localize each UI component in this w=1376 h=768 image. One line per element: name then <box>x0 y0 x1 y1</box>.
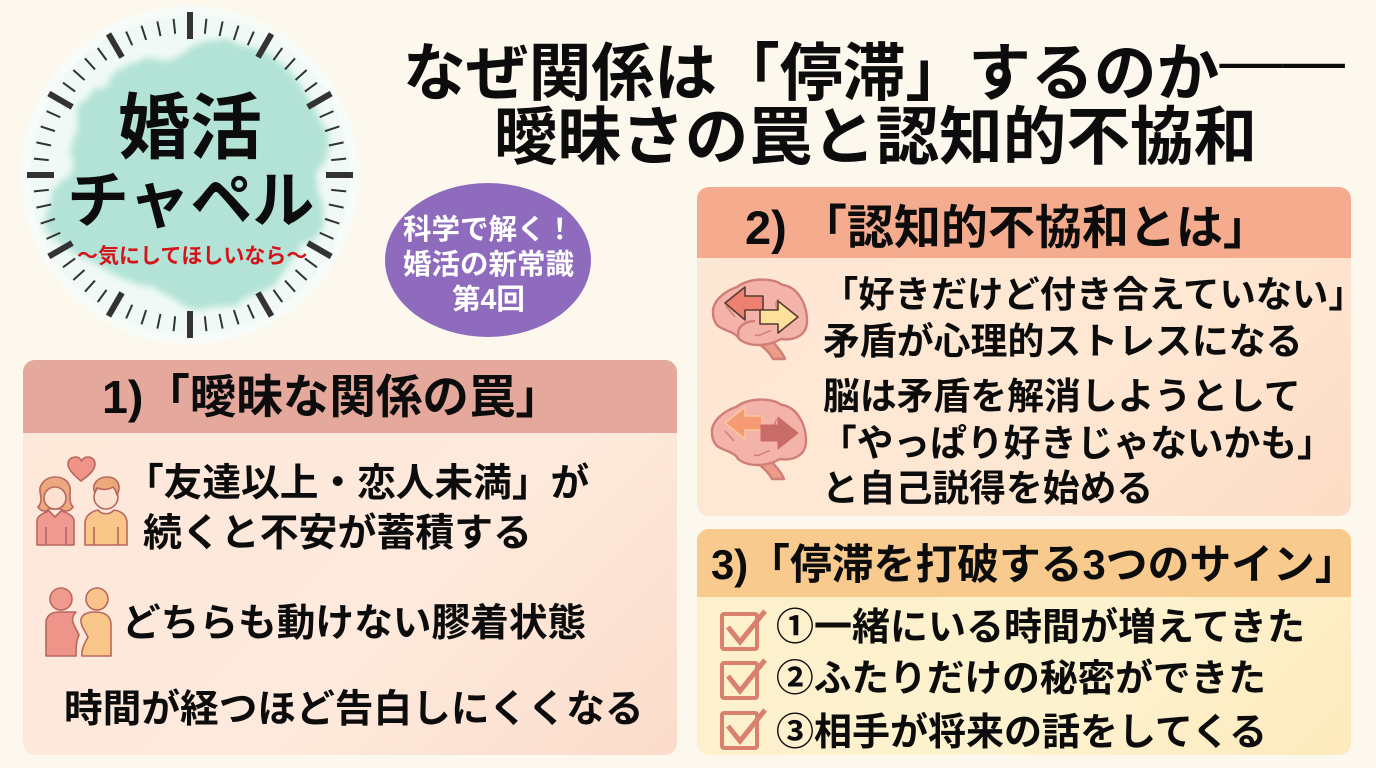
text: 友達以上: 「友達以上・恋人未満」が <box>125 462 589 505</box>
panel 3: 停滞を打破する3つのサイン <box>697 529 1351 755</box>
text: sign 2: ②ふたりだけの秘密ができた <box>776 657 1266 699</box>
panel 2: 認知的不協和とは <box>697 187 1351 516</box>
panel 2 header <box>697 187 1351 258</box>
panel 3 heading: 3)「停滞を打破する3つのサイン」 <box>711 541 1351 588</box>
text: sign 1: ①一緒にいる時間が増えてきた <box>776 607 1305 649</box>
text: 矛盾がストレス: 矛盾が心理的ストレスになる <box>823 321 1303 362</box>
text: 続くと不安: 続くと不安が蓄積する <box>143 512 532 555</box>
icon: checkbox 1 <box>720 610 767 651</box>
badge line 1: 科学で解く！ <box>403 214 574 246</box>
panel 1 heading: 1)「曖昧な関係の罠」 <box>102 371 562 423</box>
text: 脳は矛盾を解消: 脳は矛盾を解消しようとして <box>823 376 1301 417</box>
clock face with ticks <box>21 6 359 344</box>
icon: checkbox 3 <box>720 708 767 750</box>
title line 1: なぜ関係は「停滞」するのか—— <box>403 26 1345 109</box>
text: 膠着状態: どちらも動けない膠着状態 <box>122 602 586 645</box>
text: 自己説得: と自己説得を始める <box>822 468 1153 509</box>
logo subtitle: 〜気にしてほしいなら〜 <box>77 245 307 268</box>
panel 3 header <box>697 529 1351 597</box>
text: 好きだけど: 「好きだけど付き合えていない」 <box>822 274 1351 315</box>
logo: clock badge <box>21 6 359 344</box>
badge line 3: 第4回 <box>452 284 525 316</box>
title <box>403 26 1345 173</box>
icon: two people split <box>45 587 112 657</box>
icon: checkbox 2 <box>720 658 767 700</box>
text: やっぱり好きじゃない: 「やっぱり好きじゃないかも」 <box>820 423 1334 464</box>
icon: brain with arrows 2 <box>710 398 808 480</box>
badge line 2: 婚活の新常識 <box>403 249 574 281</box>
panel 1: 曖昧な関係の罠 <box>23 360 677 755</box>
icon: couple with heart <box>36 456 128 546</box>
icon: brain with arrows 1 <box>712 278 808 360</box>
logo text: 婚活: 婚活 <box>118 89 262 169</box>
text: 告白しにくくなる: 時間が経つほど告白しにくくなる <box>64 688 644 731</box>
text: sign 3: ③相手が将来の話をしてくる <box>776 712 1267 754</box>
panel 1 header <box>23 360 677 433</box>
panel 2 heading: 2) 「認知的不協和とは」 <box>745 201 1270 254</box>
title line 2: 曖昧さの罠と認知的不協和 <box>494 102 1257 173</box>
logo text: チャペル: チャペル <box>67 167 314 236</box>
series badge: purple oval <box>385 183 591 337</box>
